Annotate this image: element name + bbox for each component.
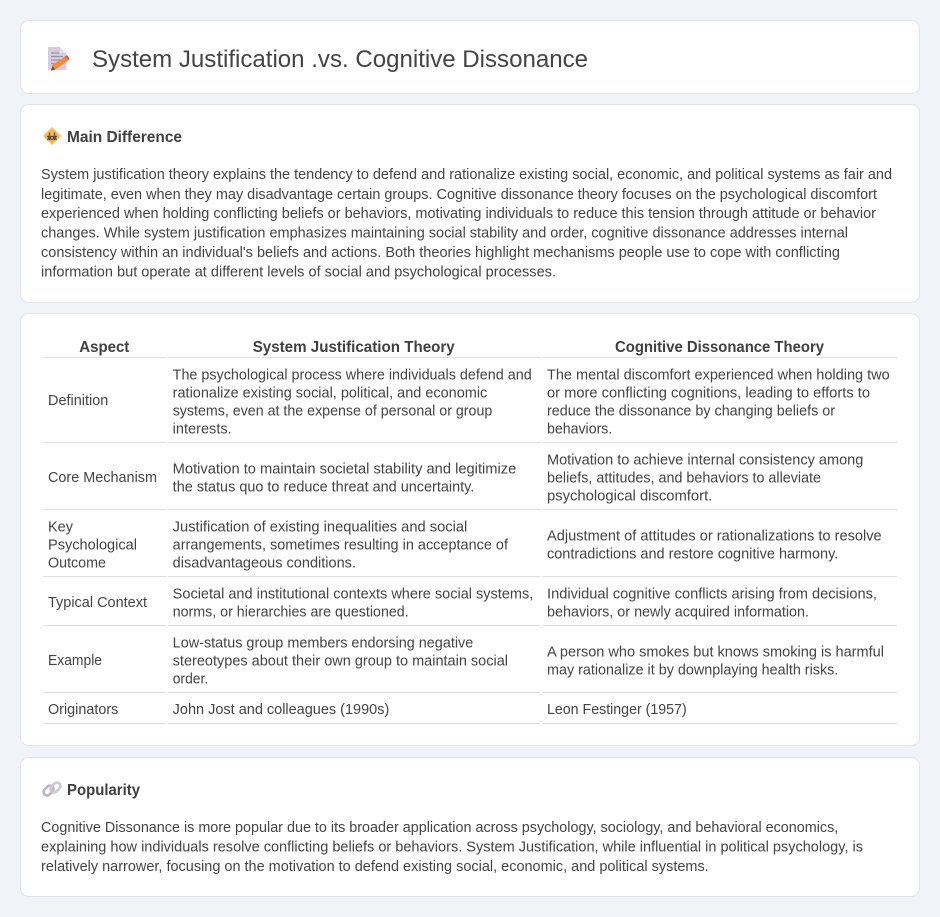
table row: typical context: norms, or hierarchies are questioned. [173, 604, 409, 620]
heading: popularity: Popularity [67, 782, 140, 799]
icon: orange diamond sign [44, 128, 60, 144]
table row: example: A person who smokes but knows smoking is harmful [547, 644, 884, 660]
text block: popularity paragraph: relatively narrower, focusing on the motivation to defend existing social, economic, and political systems. [41, 859, 709, 875]
table row: example [43, 635, 897, 692]
panel: title header [20, 20, 920, 94]
table row: definition: rationalize existing social, political, and economic [173, 385, 487, 401]
table row: definition: interests. [173, 421, 232, 437]
panel: comparison table [20, 314, 920, 746]
panel: popularity [20, 758, 920, 896]
table row: typical context [43, 586, 897, 626]
text block: main difference paragraph: legitimate, even when they may disadvantage certain groups. Cognitive dissonance theory focuses on the psychological discomfort [41, 187, 877, 203]
table row: example: Low-status group members endorsing negative [173, 635, 473, 651]
table row: example: stereotypes about their own group to maintain social [173, 653, 508, 669]
table row: key psychological outcome: Outcome [48, 555, 106, 571]
title: System Justification .vs. Cognitive Dissonance [92, 46, 588, 73]
text block: main difference paragraph: consistency within an individual's beliefs and actions. Both theories highlight mechanisms people use to cope with conflicting [41, 245, 840, 261]
table row: key psychological outcome: contradictions and restore cognitive harmony. [547, 546, 838, 562]
table row: originators: Originators [48, 702, 118, 718]
table row: core mechanism: Core Mechanism [48, 470, 157, 486]
text block: popularity paragraph [41, 820, 863, 875]
table row: core mechanism: Motivation to achieve internal consistency among [547, 452, 863, 468]
table row: definition: behaviors. [547, 421, 612, 437]
table row: originators [43, 702, 897, 724]
table row: core mechanism: Motivation to maintain societal stability and legitimize [173, 461, 516, 477]
table row: key psychological outcome: arrangements, sometimes resulting in acceptance of [173, 537, 508, 553]
table row: core mechanism: psychological discomfort. [547, 488, 712, 504]
table row: definition: systems, even at the expense of personal or group [173, 403, 492, 419]
table: header row [43, 339, 897, 358]
heading: main difference: Main Difference [67, 129, 182, 146]
text block: main difference paragraph: experienced when holding conflicting beliefs or behaviors, motivating individuals to reduce this tension through attitude or behavior [41, 206, 876, 222]
text block: main difference paragraph: System justification theory explains the tendency to defend and rationalize existing social, economic, and political systems as fair and [41, 167, 892, 183]
table row: example: may rationalize it by downplaying health risks. [547, 662, 838, 678]
table row: core mechanism [43, 452, 897, 510]
table row: key psychological outcome: Adjustment of attitudes or rationalizations to resolve [547, 528, 882, 544]
table row: example: order. [173, 671, 208, 687]
table row: typical context: Societal and institutional contexts where social systems, [173, 586, 533, 602]
text block: popularity paragraph: Cognitive Dissonance is more popular due to its broader application across psychology, sociology, and behavioral economics, [41, 820, 838, 836]
table row: definition [43, 367, 897, 442]
table row: core mechanism: beliefs, attitudes, and behaviors to alleviate [547, 470, 821, 486]
panel: main difference [20, 104, 920, 302]
text block: main difference paragraph [41, 167, 892, 280]
table row: definition: or more conflicting cognitions, leading to efforts to [547, 385, 870, 401]
table row: key psychological outcome: Psychological [48, 537, 137, 553]
table row: definition: The mental discomfort experienced when holding two [547, 367, 890, 383]
table: header row: Aspect [79, 339, 130, 356]
text block: popularity paragraph: explaining how individuals resolve conflicting beliefs or behaviors. System Justification, while influential in political psychology, is [41, 840, 863, 856]
table row: typical context: Typical Context [48, 595, 147, 611]
table row: typical context: Individual cognitive conflicts arising from decisions, [547, 586, 877, 602]
table row: key psychological outcome: Key [48, 519, 74, 535]
table row: originators: Leon Festinger (1957) [547, 702, 687, 718]
icon: document with pencil [48, 47, 70, 70]
table row: definition: reduce the dissonance by changing beliefs or [547, 403, 835, 419]
table row: definition: Definition [48, 393, 108, 409]
text block: main difference paragraph: information but operate at different levels of social and psychological processes. [41, 264, 556, 280]
table row: originators: John Jost and colleagues (1990s) [173, 702, 389, 718]
table: header row: Cognitive Dissonance Theory [615, 339, 824, 356]
icon: chain link [42, 781, 62, 797]
table row: typical context: behaviors, or newly acquired information. [547, 604, 809, 620]
table: header row: System Justification Theory [253, 339, 455, 356]
table row: definition: The psychological process where individuals defend and [173, 367, 532, 383]
table row: key psychological outcome: disadvantageous conditions. [173, 555, 356, 571]
table row: key psychological outcome: Justification of existing inequalities and social [173, 519, 467, 535]
table row: core mechanism: the status quo to reduce threat and uncertainty. [173, 479, 474, 495]
table row: example: Example [48, 653, 102, 669]
text block: main difference paragraph: changes. While system justification emphasizes maintaining social stability and order, cognitive dissonance addresses internal [41, 226, 848, 242]
table row: key psychological outcome [43, 519, 897, 576]
